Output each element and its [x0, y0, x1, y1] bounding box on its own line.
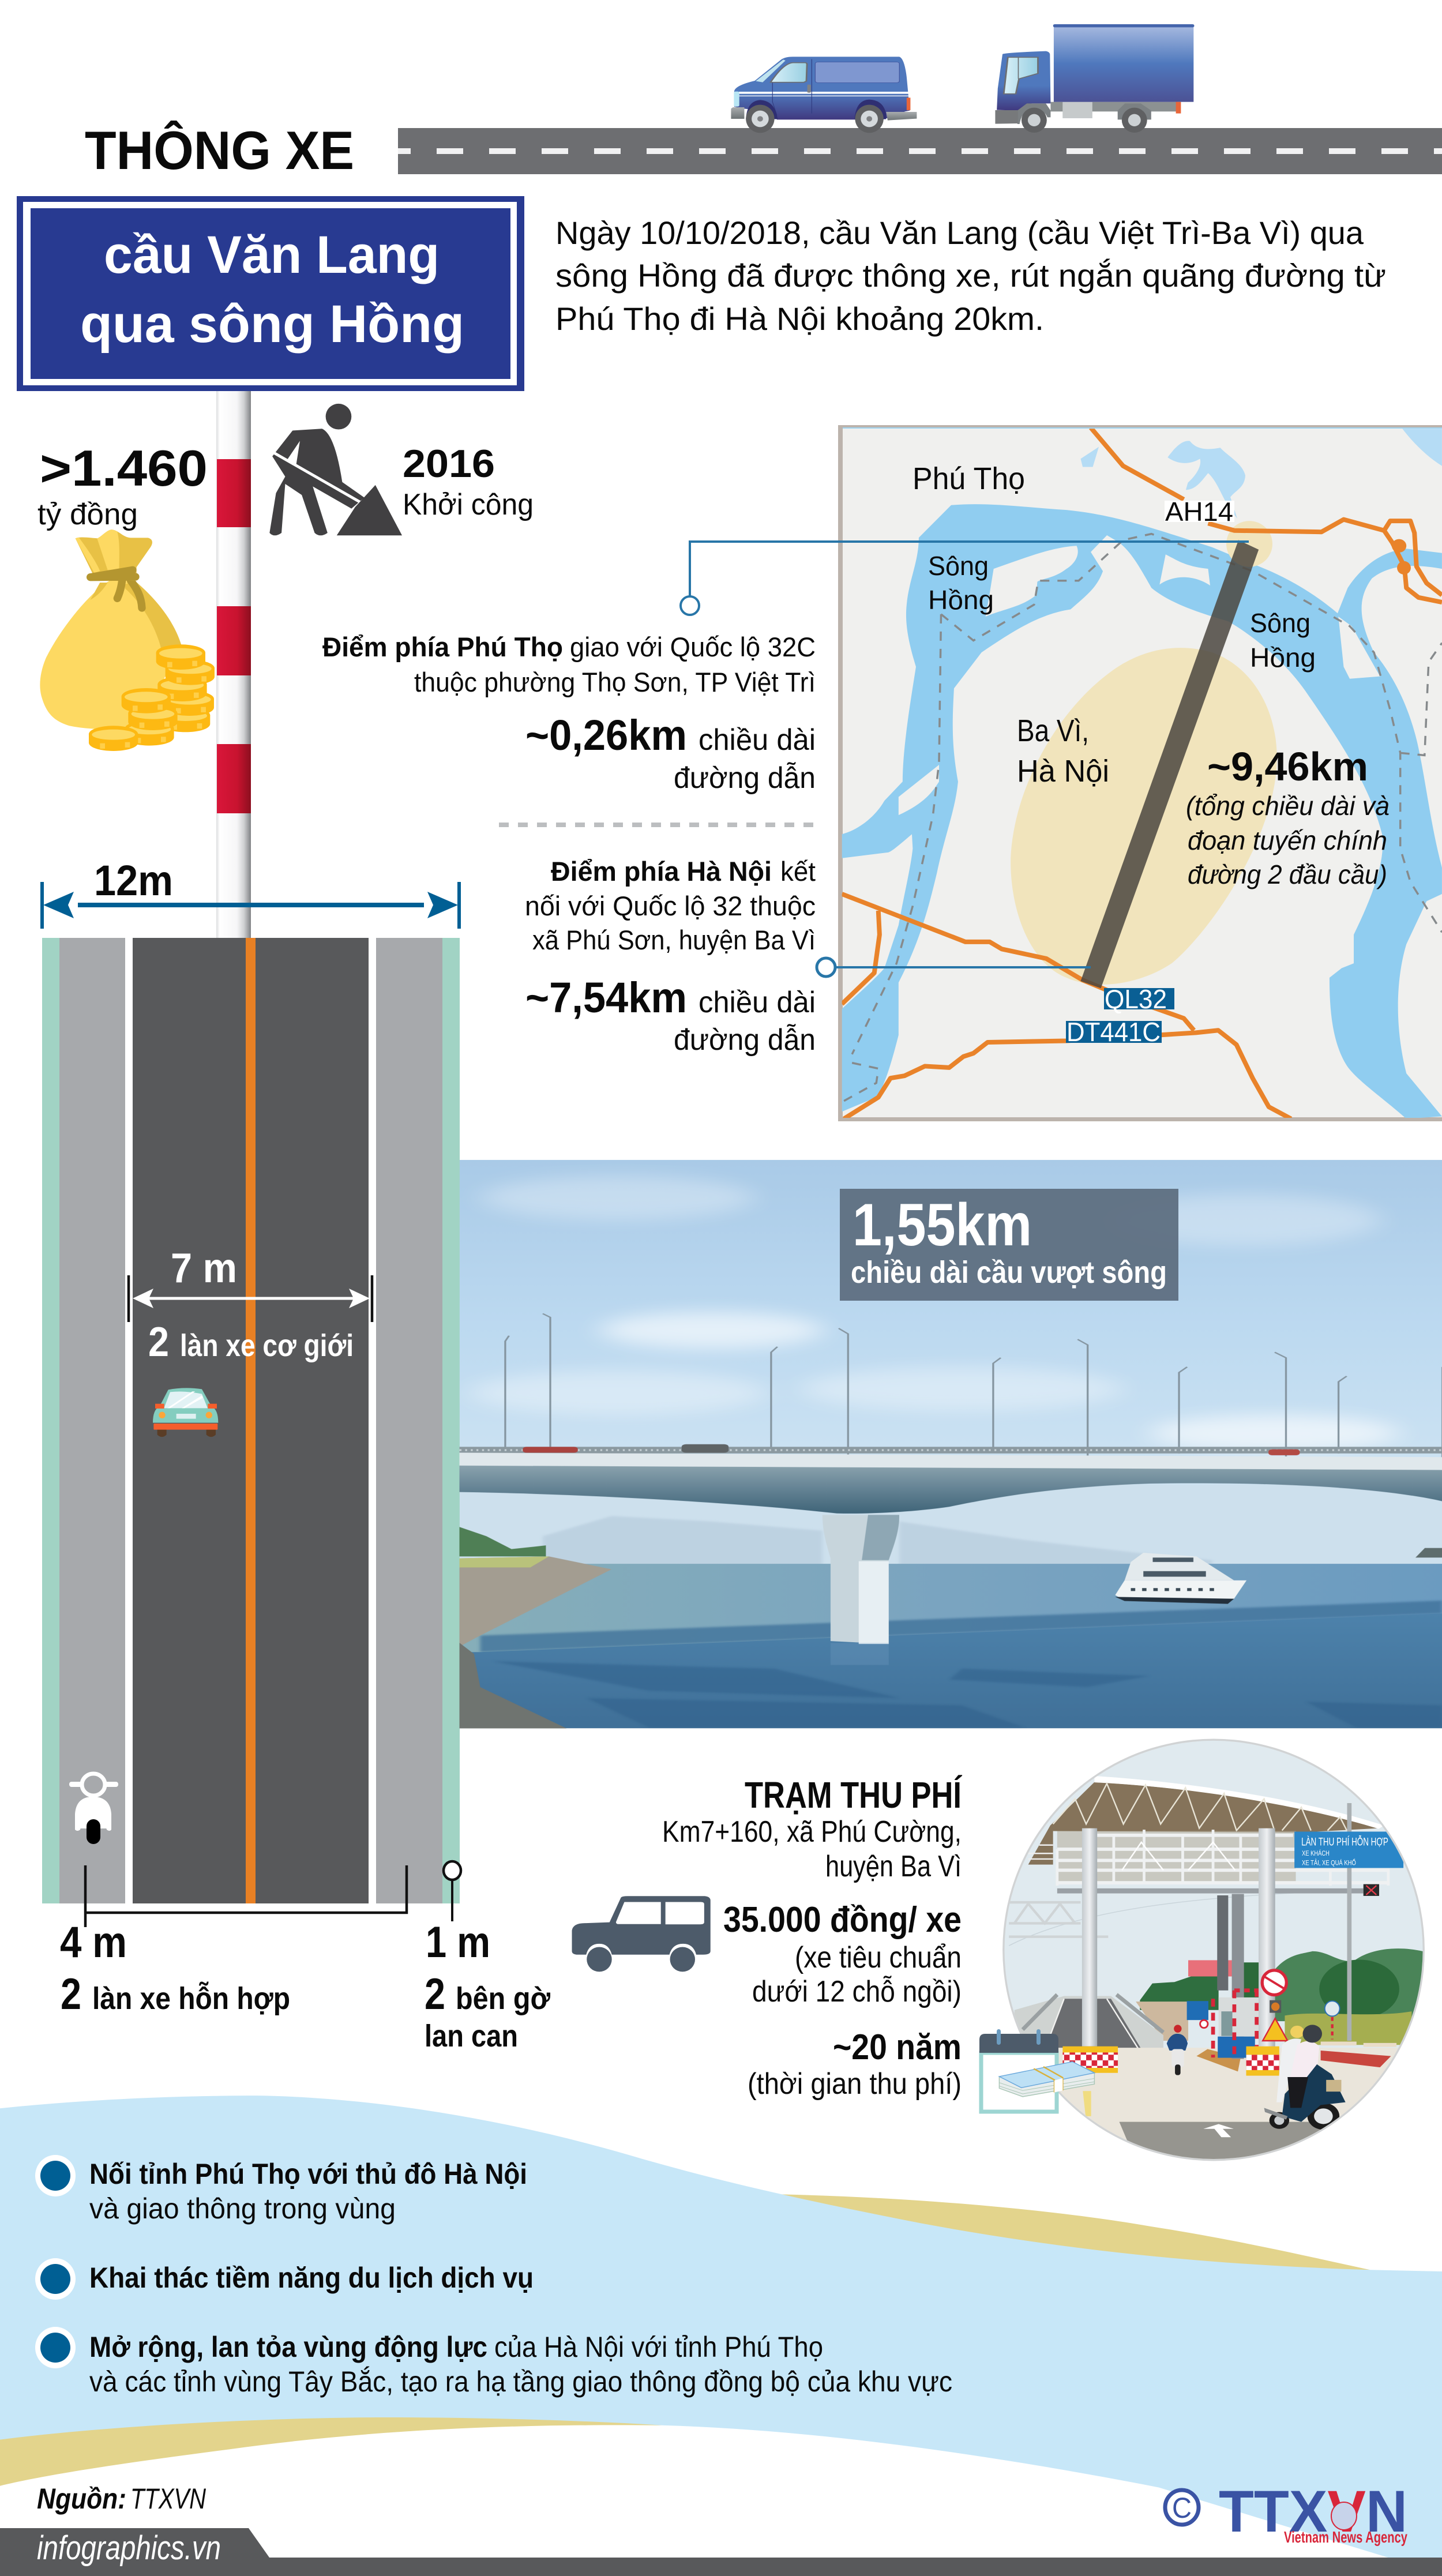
dimension: 12m: 12m — [94, 857, 173, 904]
total length callout — [1186, 744, 1390, 889]
bullet 1: và giao thông trong vùng — [89, 2192, 396, 2225]
map place names: Hà Nội — [1017, 754, 1109, 788]
source note: TTXVN — [130, 2483, 206, 2515]
icon: blue truck — [995, 24, 1194, 133]
text: Hà Nội end point: chiều dài — [699, 986, 816, 1019]
footer bar: infographics.vn — [37, 2529, 221, 2567]
leader line: Phú Thọ end — [681, 542, 1249, 615]
label: 4 m mixed lanes: 4 m — [60, 1918, 127, 1967]
text: Hà Nội end point: nối với Quốc lộ 32 thuộc — [525, 891, 816, 921]
toll station photo — [998, 1730, 1439, 2178]
map place names: Ba Vì, — [1017, 714, 1089, 748]
text: Phú Thọ end point — [322, 632, 816, 795]
label: 1 m guardrail: bên gờ — [456, 1981, 551, 2016]
title sign: cầu Văn Lang qua sông Hồng: cầu Văn Lang — [104, 226, 440, 284]
icon: blue van — [731, 57, 917, 133]
start year — [403, 442, 534, 521]
title: THÔNG XE: THÔNG XE — [85, 120, 354, 181]
intro paragraph — [555, 215, 1386, 337]
bridge route bar — [1081, 540, 1259, 988]
bullet 1: Nối tỉnh Phú Thọ với thủ đô Hà Nội — [89, 2158, 527, 2190]
total length callout: (tổng chiều dài và — [1186, 791, 1390, 821]
label: 2 motor lanes — [148, 1319, 354, 1365]
bullet 3: và các tỉnh vùng Tây Bắc, tạo ra hạ tầng giao thông đồng bộ của khu vực — [89, 2365, 952, 2398]
photo: bridge over river — [460, 1160, 1442, 1730]
pole with red bands — [216, 390, 251, 938]
source note — [37, 2483, 206, 2515]
label: 4 m mixed lanes: làn xe hỗn hợp — [92, 1981, 290, 2016]
bullet 2 — [35, 2258, 534, 2300]
bullet 1 — [35, 2155, 527, 2225]
label: 4 m mixed lanes — [60, 1918, 290, 2019]
rider far — [1167, 2025, 1188, 2075]
map place names — [912, 461, 1316, 788]
dimension: 12m — [42, 857, 459, 929]
text: Hà Nội end point — [525, 856, 816, 1057]
road labels on map: QL32 — [1105, 984, 1167, 1014]
text: toll station — [662, 1774, 963, 2101]
total length callout: đoạn tuyến chính — [1188, 825, 1387, 855]
text: Phú Thọ end point: chiều dài — [699, 723, 816, 757]
intro paragraph: sông Hồng đã được thông xe, rút ngắn quãng đường từ — [555, 257, 1386, 294]
signs — [1187, 1970, 1340, 2041]
sign board: XE KHÁCH — [1302, 1850, 1330, 1857]
dimension: 7 m — [129, 1245, 372, 1322]
icon: calendar — [979, 2029, 1058, 2112]
text: Phú Thọ end point: Điểm phía Phú Thọ — [322, 632, 563, 662]
icon: jeep — [572, 1896, 711, 1972]
road labels on map — [1066, 497, 1234, 1047]
map place names: Hồng — [928, 585, 994, 615]
text: Hà Nội end point: Điểm phía Hà Nội — [551, 856, 772, 887]
icon: construction worker — [269, 404, 402, 535]
start year: 2016 — [403, 442, 495, 486]
leader line: Hà Nội end — [817, 958, 1091, 977]
panel: route map — [838, 425, 1442, 1121]
yacht — [1115, 1553, 1246, 1604]
intro paragraph: Ngày 10/10/2018, cầu Văn Lang (cầu Việt Trì-Ba Vì) qua — [555, 215, 1364, 251]
text: toll station: huyện Ba Vì — [825, 1850, 962, 1883]
start year: Khởi công — [403, 488, 534, 521]
total length callout: đường 2 đầu cầu) — [1188, 859, 1387, 889]
footer bar — [0, 2528, 1442, 2576]
label: 1 m guardrail: lan can — [425, 2019, 518, 2053]
toll booth — [1213, 1989, 1259, 2059]
text: Phú Thọ end point: đường dẫn — [674, 761, 816, 795]
gantry — [1009, 1830, 1390, 1937]
trees — [1140, 1948, 1423, 2045]
sign board: LÀN THU PHÍ HỖN HỢP — [1301, 1836, 1388, 1849]
cost figure: >1.460 — [40, 440, 208, 497]
text: toll station: Km7+160, xã Phú Cường, — [662, 1815, 962, 1849]
icon: banknote stack — [999, 2061, 1094, 2097]
icon: motorbike — [69, 1774, 118, 1844]
text: Phú Thọ end point: giao với Quốc lộ 32C — [570, 632, 816, 662]
bottom wave: blue background — [0, 2096, 1442, 2560]
dimension: 7 m: 7 m — [171, 1245, 237, 1291]
text: toll station: (thời gian thu phí) — [748, 2067, 962, 2101]
label: 2 motor lanes: 2 — [148, 1319, 169, 1365]
sign board — [1294, 1831, 1403, 1868]
text: Hà Nội end point: kết — [780, 856, 816, 887]
map place names: Sông — [1250, 608, 1310, 638]
source note: Nguồn: — [37, 2483, 126, 2515]
pillars — [1082, 1803, 1351, 2059]
text: Hà Nội end point: xã Phú Sơn, huyện Ba Vì — [532, 925, 816, 955]
text: Phú Thọ end point: ~0,26km — [525, 711, 687, 759]
canopy — [1028, 1776, 1384, 1865]
intro paragraph: Phú Thọ đi Hà Nội khoảng 20km. — [555, 301, 1044, 337]
road strip — [398, 128, 1442, 174]
callout: 1,55km bridge length — [840, 1189, 1178, 1301]
title sign: cầu Văn Lang qua sông Hồng — [17, 196, 524, 391]
marker: 1 m — [444, 1861, 461, 1921]
bullet 3 — [35, 2327, 952, 2398]
text: toll station: TRẠM THU PHÍ — [745, 1774, 963, 1816]
text: toll station: dưới 12 chỗ ngồi) — [752, 1975, 962, 2008]
map geography: river, areas, roads — [842, 427, 1442, 1119]
cost figure — [37, 440, 208, 531]
label: 4 m mixed lanes: 2 — [61, 1970, 81, 2019]
sign board: XE TẢI, XE QUÁ KHỔ — [1302, 1860, 1356, 1867]
road labels on map: AH14 — [1165, 497, 1233, 527]
riders near — [1264, 2025, 1346, 2130]
bullet 3: Mở rộng, lan tỏa vùng động lực — [89, 2331, 487, 2363]
road cross-section — [42, 938, 460, 1903]
logo: TTXVN: C — [1172, 2492, 1192, 2524]
icon: car on motor lane — [153, 1388, 218, 1437]
label: 1 m guardrail — [425, 1918, 551, 2053]
text: Hà Nội end point: đường dẫn — [674, 1023, 816, 1057]
map place names: Hồng — [1250, 643, 1316, 673]
label: 1 m guardrail: 2 — [425, 1970, 445, 2019]
text: Hà Nội end point: ~7,54km — [525, 974, 687, 1022]
bullet 3: của Hà Nội với tỉnh Phú Thọ — [494, 2331, 823, 2363]
total length callout: ~9,46km — [1207, 744, 1368, 789]
map place names: Phú Thọ — [912, 461, 1025, 496]
bullet 2: Khai thác tiềm năng du lịch dịch vụ — [89, 2262, 534, 2294]
text: toll station: 35.000 đồng/ xe — [723, 1900, 962, 1940]
text: toll station: (xe tiêu chuẩn — [795, 1941, 962, 1974]
text: Phú Thọ end point: thuộc phường Thọ Sơn, TP Việt Trì — [414, 667, 816, 697]
callout: 1,55km bridge length: 1,55km — [853, 1192, 1032, 1259]
label: 1 m guardrail: 1 m — [426, 1918, 490, 1967]
map place names: Sông — [928, 551, 989, 581]
barriers — [1062, 2044, 1396, 2076]
bullet list: benefits — [35, 2155, 952, 2398]
title sign: cầu Văn Lang qua sông Hồng: qua sông Hồng — [80, 295, 464, 354]
icon: money bag and coins — [40, 530, 215, 751]
road labels on map: DT441C — [1067, 1017, 1161, 1047]
callout: 1,55km bridge length: chiều dài cầu vượt sông — [851, 1255, 1167, 1290]
text: toll station: ~20 năm — [833, 2027, 962, 2067]
logo: TTXVN: TTXVN — [1219, 2479, 1407, 2544]
label: 2 motor lanes: làn xe cơ giới — [180, 1328, 354, 1363]
cost figure: tỷ đồng — [37, 498, 138, 531]
dimension bracket: 4 m — [85, 1865, 407, 1927]
